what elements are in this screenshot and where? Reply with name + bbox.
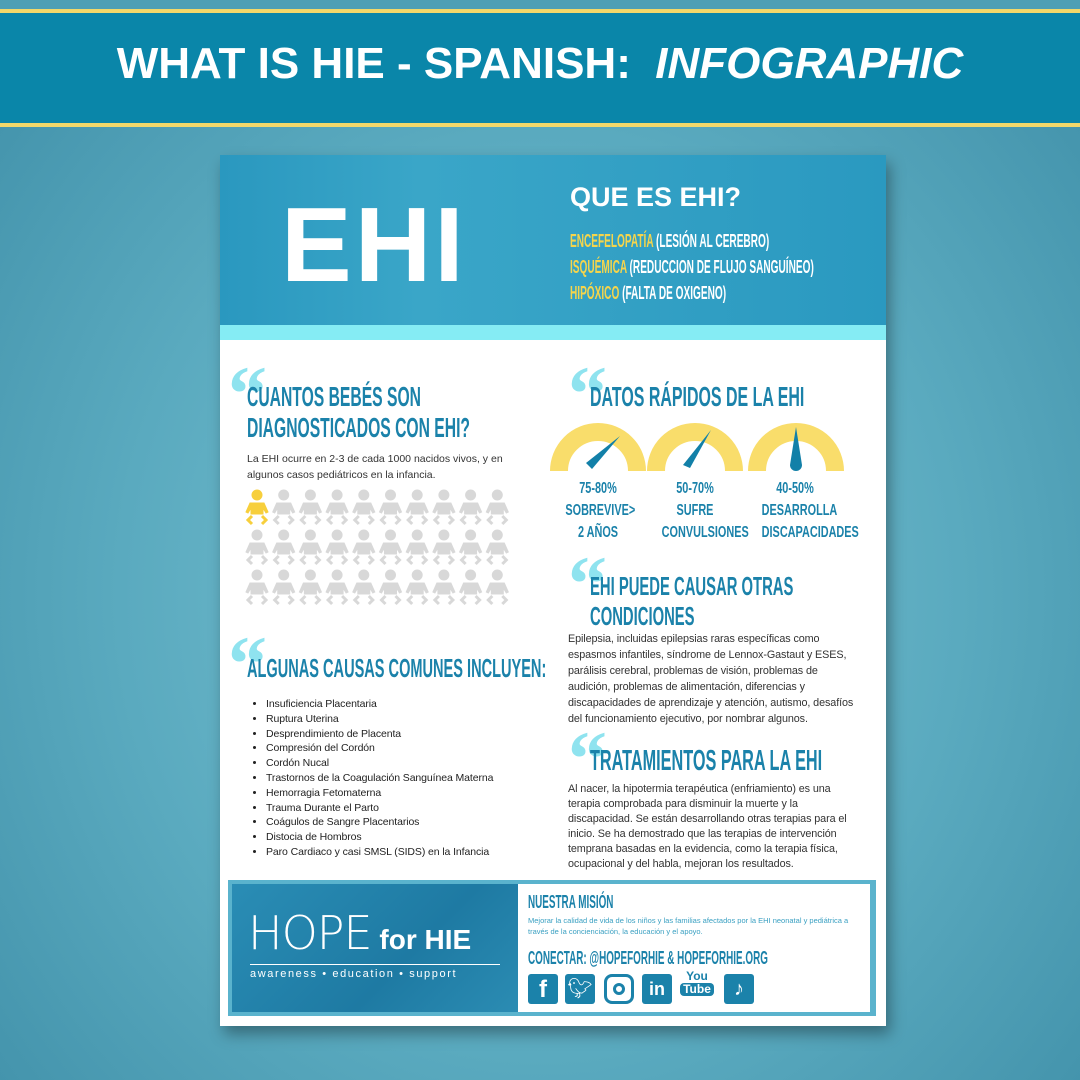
gauges	[550, 423, 844, 471]
heading: TRATAMIENTOS PARA LA EHI	[590, 745, 822, 777]
baby icon grid	[245, 490, 509, 605]
list	[253, 698, 494, 858]
title: WHAT IS HIE - SPANISH: INFOGRAPHIC	[117, 39, 963, 88]
heading: DIAGNOSTICADOS CON EHI?	[247, 412, 470, 443]
gauge labels: SUFRE	[677, 502, 713, 519]
footer	[228, 880, 876, 1016]
gauge labels: 75-80%	[579, 480, 617, 497]
que es ehi: QUE ES EHI?	[570, 182, 741, 212]
title banner	[0, 0, 1080, 127]
header panel	[220, 155, 886, 340]
heading	[247, 381, 470, 443]
gauge labels: DESARROLLA	[762, 502, 837, 519]
gauge labels: 50-70%	[676, 480, 714, 497]
text: La EHI ocurre en 2-3 de cada 1000 nacidos vivos, y en algunos casos pediátricos en la infancia.	[247, 453, 503, 481]
list: Compresión del Cordón	[266, 742, 375, 754]
gauge labels	[565, 480, 859, 541]
list: Cordón Nucal	[266, 757, 329, 769]
list: Coágulos de Sangre Placentarios	[266, 816, 419, 828]
list: Paro Cardiaco y casi SMSL (SIDS) en la Infancia	[266, 846, 489, 858]
heading: CONDICIONES	[590, 601, 695, 631]
heading: CUANTOS BEBÉS SON	[247, 381, 421, 412]
definitions: ENCEFELOPATÍA (LESIÓN AL CEREBRO)	[570, 231, 769, 251]
list: Hemorragia Fetomaterna	[266, 787, 381, 799]
social icons: f	[539, 976, 547, 1003]
definitions	[570, 230, 814, 303]
list: Trastornos de la Coagulación Sanguínea Materna	[266, 772, 493, 784]
list: Distocia de Hombros	[266, 831, 362, 843]
list: Insuficiencia Placentaria	[266, 698, 377, 710]
panel: cuantos bebes: “	[228, 350, 267, 437]
logo panel	[232, 884, 518, 1012]
gauge labels: DISCAPACIDADES	[762, 524, 859, 541]
EHI big text: EHI	[281, 186, 467, 304]
heading: ALGUNAS CAUSAS COMUNES INCLUYEN:	[247, 653, 546, 683]
text: Epilepsia, incluidas epilepsias raras específicas como espasmos infantiles, síndrome de Lennox-Gastaut y ESES, parálisis cerebral, problemas de visión, problemas de audición, problemas de alimentación, diferencias y discapacidades de aprendizaje y atención, autismo, desafíos del funcionamiento ejecutivo, por nombrar algunos.	[568, 633, 853, 725]
panel: otras condiciones	[568, 540, 853, 725]
social icons: 🐦︎	[567, 978, 593, 1000]
panel: tratamientos	[568, 715, 847, 870]
mision heading: NUESTRA MISIÓN	[528, 892, 613, 912]
list: Ruptura Uterina	[266, 713, 339, 725]
panel: causas	[228, 620, 546, 858]
text: Al nacer, la hipotermia terapéutica (enfriamiento) es una terapia comprobada para disminuir la muerte y la discapacidad. Se están desarrollando otras terapias para el inicio. Se ha demostrado que las terapias de intervención temprana basadas en la evidencia, como la terapia física, ocupacional y del habla, mejoran los resultados.	[568, 783, 847, 870]
gauge labels: SOBREVIVE>	[565, 502, 635, 519]
gauge labels: 2 AÑOS	[578, 524, 618, 541]
social icons	[528, 969, 754, 1004]
heading: EHI PUEDE CAUSAR OTRAS	[590, 571, 793, 601]
logo panel: HOPE for HIE	[248, 906, 471, 960]
list: Trauma Durante el Parto	[266, 802, 379, 814]
logo panel: awareness • education • support	[250, 968, 457, 980]
panel: tratamientos: “	[568, 715, 607, 802]
social icons: ♪	[734, 978, 744, 1000]
definitions: HIPÓXICO (FALTA DE OXIGENO)	[570, 283, 726, 303]
panel: cuantos bebes	[228, 350, 503, 481]
panel: causas: “	[228, 620, 267, 707]
document	[220, 155, 886, 1026]
list: Desprendimiento de Placenta	[266, 728, 401, 740]
social icons: in	[649, 979, 665, 999]
social icons: Tube	[683, 982, 711, 996]
panel: datos rapidos: “	[568, 350, 607, 437]
mission panel	[518, 884, 870, 1012]
conectar: CONECTAR: @HOPEFORHIE & HOPEFORHIE.ORG	[528, 948, 768, 968]
social icons: You	[686, 969, 708, 983]
heading	[590, 571, 793, 631]
mision text: Mejorar la calidad de vida de los niños y las familias afectados por la EHI neonatal y pediátrica a través de la concienciación, la educación y el apoyo.	[528, 916, 848, 936]
gauge labels: CONVULSIONES	[662, 524, 749, 541]
panel: datos rapidos	[550, 350, 859, 541]
definitions: ISQUÉMICA (REDUCCION DE FLUJO SANGUÍNEO)	[570, 257, 814, 277]
gauge labels: 40-50%	[776, 480, 814, 497]
panel: otras condiciones: “	[568, 540, 607, 627]
heading: DATOS RÁPIDOS DE LA EHI	[590, 381, 804, 412]
